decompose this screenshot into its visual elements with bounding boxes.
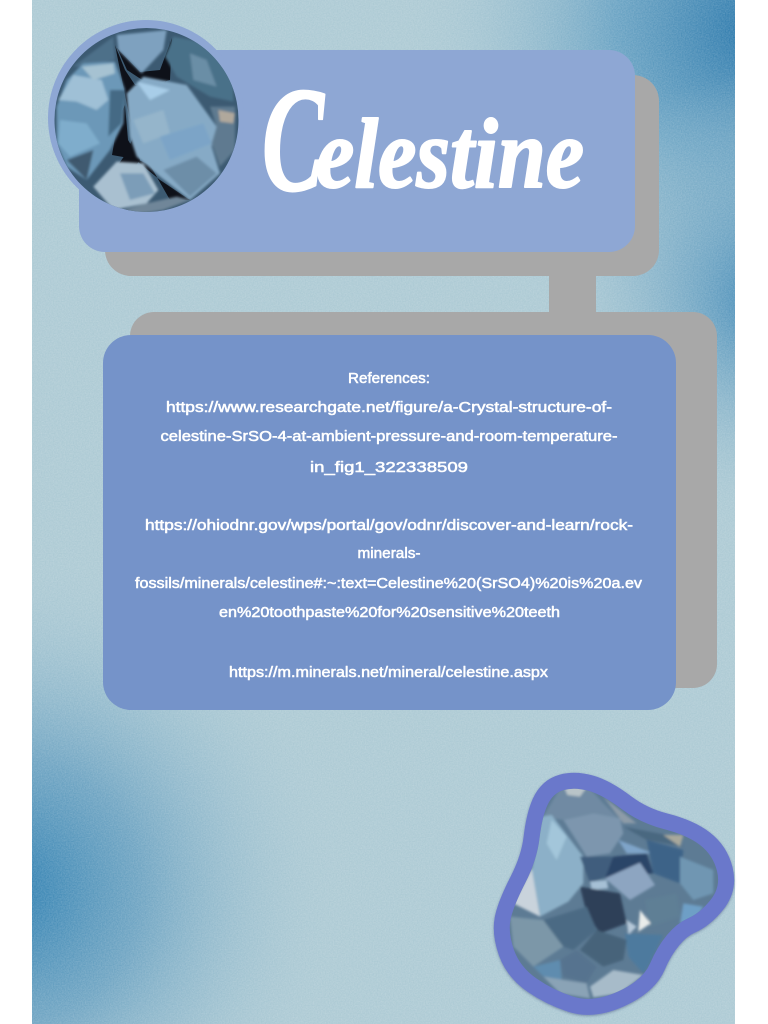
connector between panels <box>549 270 596 320</box>
references text: in_fig1_322338509 <box>310 459 468 476</box>
references text: minerals- <box>358 545 420 562</box>
references text: https://m.minerals.net/mineral/celestine.aspx <box>229 664 549 681</box>
references text <box>135 370 643 681</box>
title: C <box>262 57 325 223</box>
references text: References: <box>348 370 430 387</box>
photo: round celestine crystals <box>48 20 245 220</box>
references text: https://www.researchgate.net/figure/a-Crystal-structure-of- <box>166 399 612 416</box>
references text: fossils/minerals/celestine#:~:text=Celestine%20(SrSO4)%20is%20a.ev <box>135 575 643 592</box>
title: elestine <box>316 98 584 209</box>
references panel <box>103 335 676 710</box>
crystal geode photo <box>510 788 718 999</box>
references text: en%20toothpaste%20for%20sensitive%20teeth <box>219 604 560 621</box>
references text: https://ohiodnr.gov/wps/portal/gov/odnr/discover-and-learn/rock- <box>145 517 633 534</box>
photo: blob-framed celestine crystals <box>500 780 730 1010</box>
references panel shadow <box>130 312 717 688</box>
references text: celestine-SrSO-4-at-ambient-pressure-and-room-temperature- <box>160 428 618 445</box>
title panel shadow <box>105 75 659 276</box>
blob frame <box>510 789 718 999</box>
title panel <box>79 50 635 252</box>
title <box>262 57 584 223</box>
crystal cluster photo <box>54 28 238 212</box>
photo ring <box>48 20 244 216</box>
